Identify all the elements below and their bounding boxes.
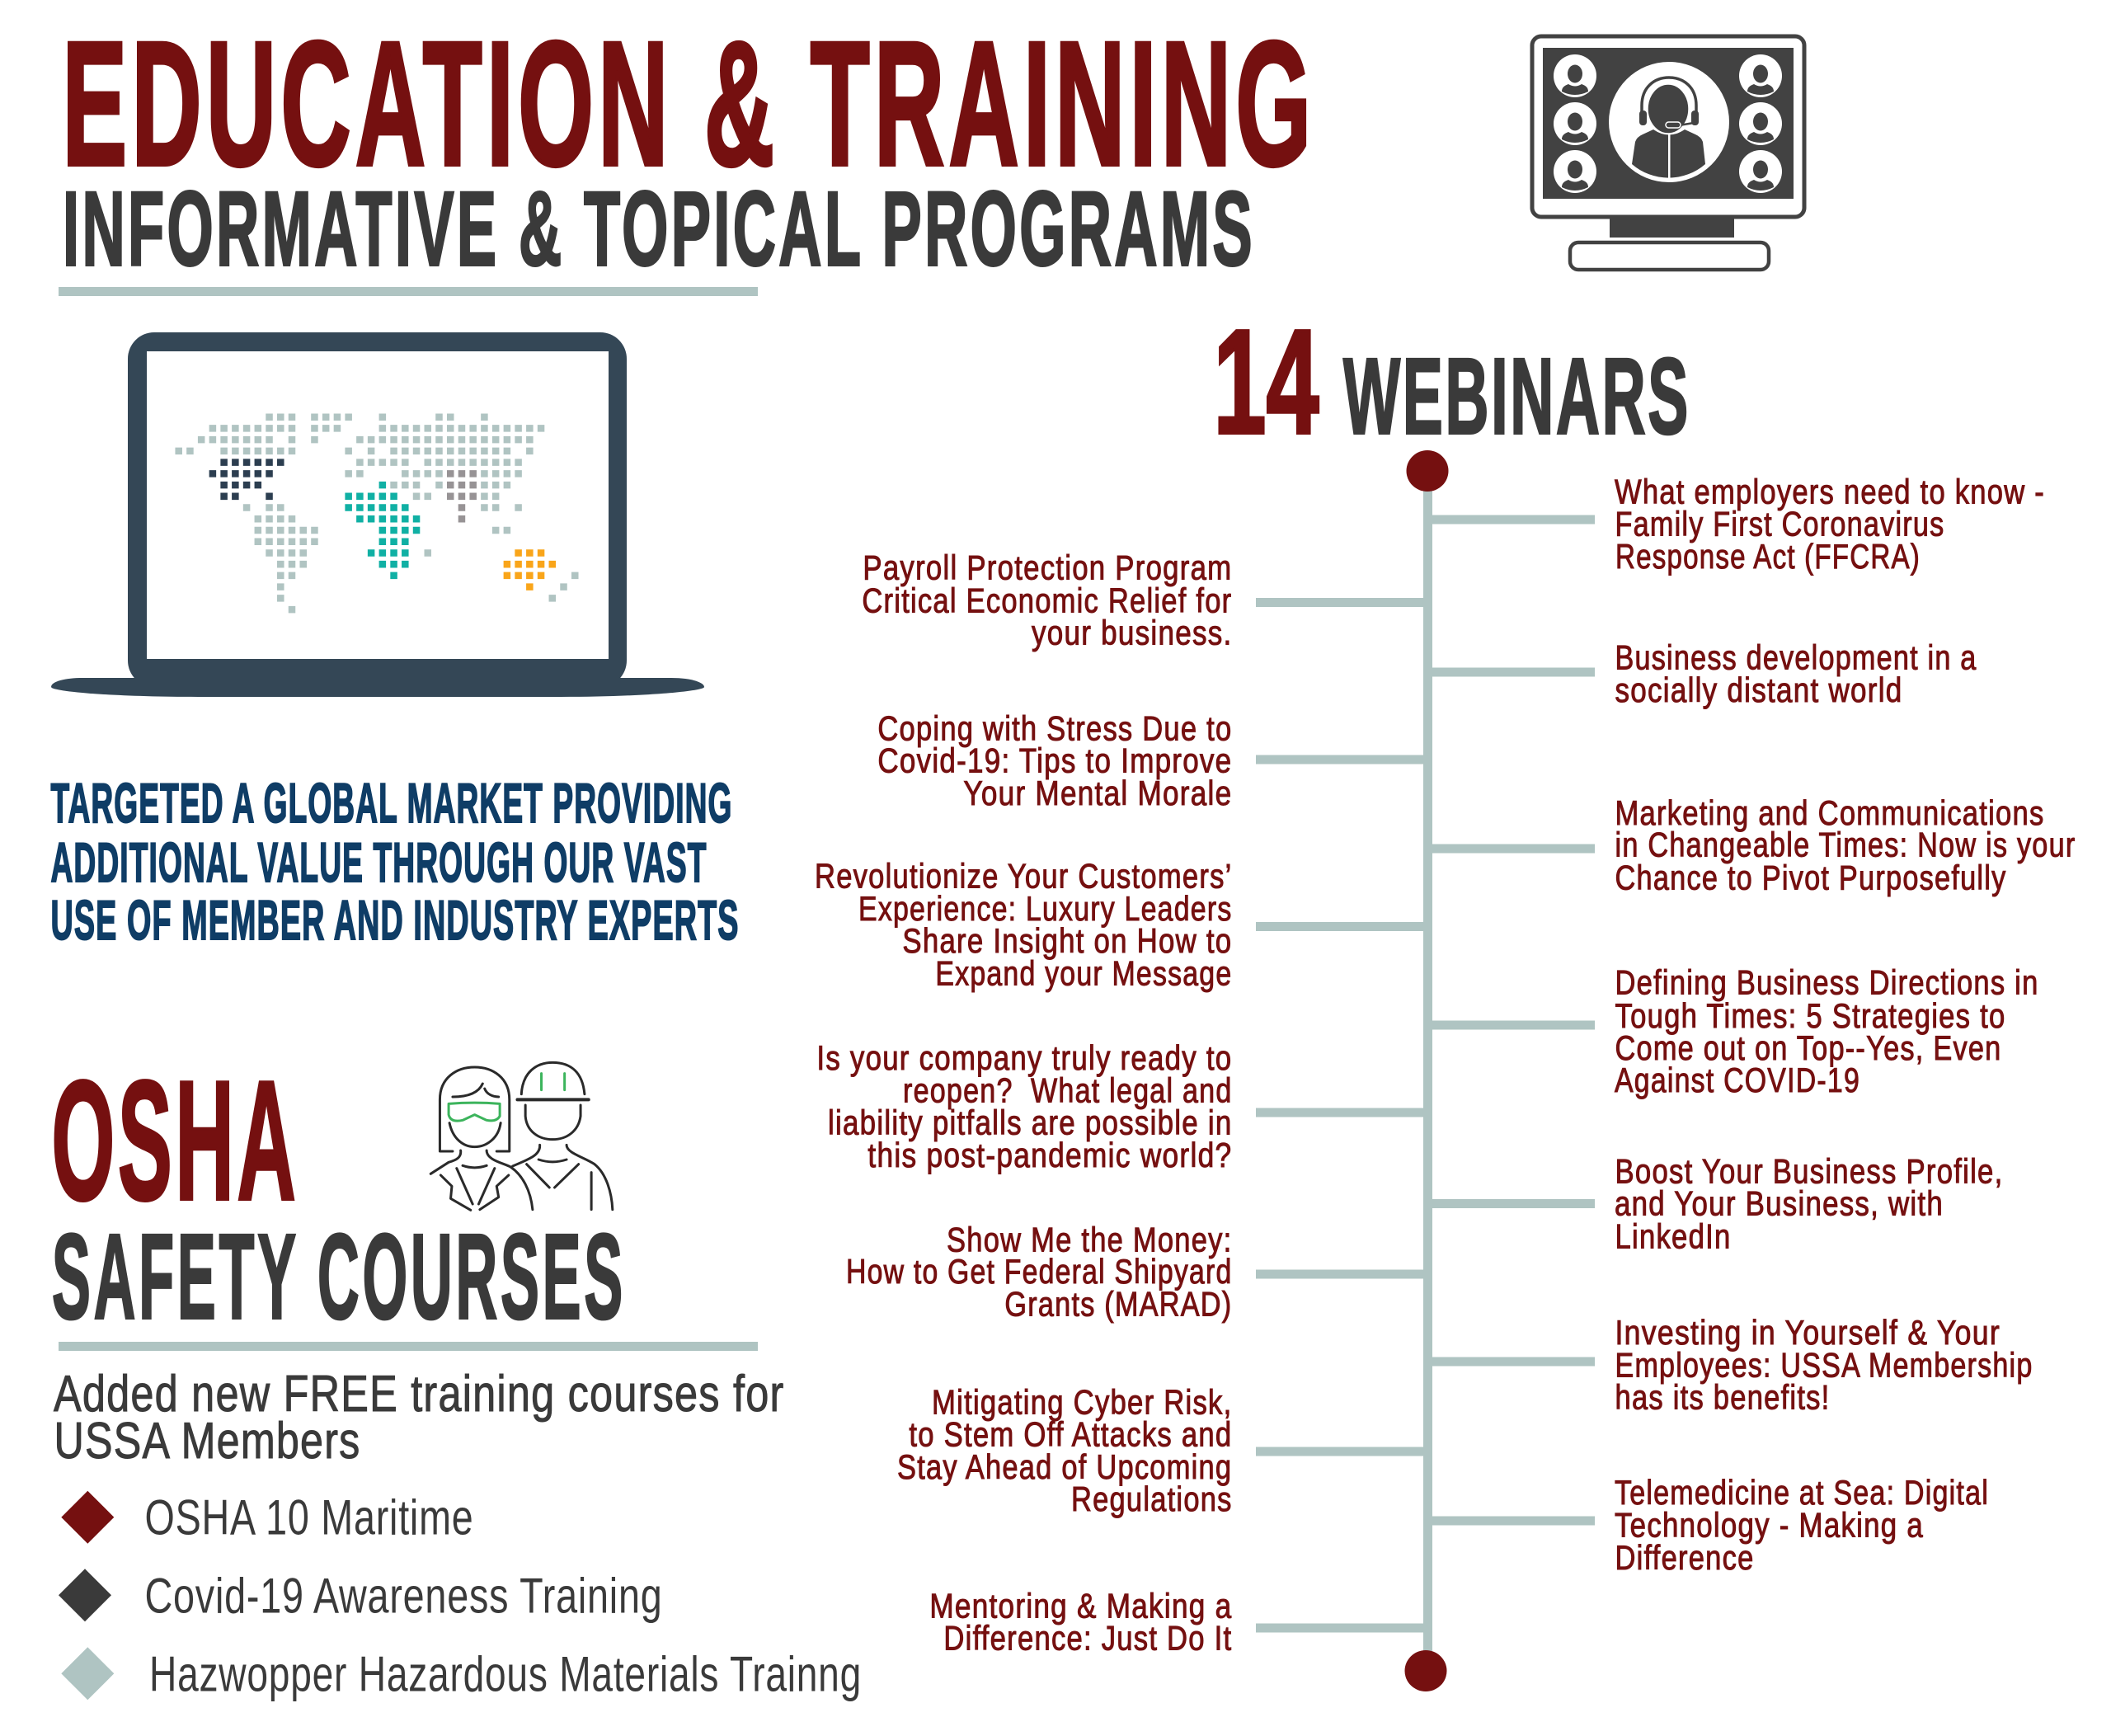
webinar: Coping with Stress: Your Mental Morale — [963, 774, 1232, 812]
webinar: Is your company truly ready: reopen? What legal and — [903, 1070, 1232, 1109]
webinar: Boost Your Business Profile: Boost Your Business Profile, — [1615, 1152, 2004, 1191]
webinar: What employers need to know: Response Act (FFCRA) — [1615, 537, 1921, 576]
webinar: Payroll Protection Program — [862, 548, 1232, 652]
text block: global market statement: ADDITIONAL VALUE THROUGH OUR VAST — [51, 831, 707, 894]
heading: 14 webinars — [1214, 299, 1690, 465]
webinar: Revolutionize Your Customers' Experience: Share Insight on How to — [902, 921, 1232, 960]
timeline — [1256, 450, 1595, 1691]
webinar: Investing in Yourself: has its benefits! — [1615, 1378, 1831, 1417]
webinar: Marketing and Communications: Chance to Pivot Purposefully — [1615, 858, 2007, 896]
section rule — [59, 1342, 758, 1351]
webinar: Revolutionize Your Customers' Experience: Experience: Luxury Leaders — [858, 889, 1232, 928]
text block: free training courses: Added new FREE training courses for — [54, 1366, 785, 1423]
icon: webinar monitor — [1532, 36, 1804, 270]
webinar: Payroll Protection Program: Payroll Protection Program — [863, 548, 1232, 587]
webinar: Is your company truly ready: this post-pandemic world? — [867, 1136, 1232, 1174]
webinar: Telemedicine at Sea: Difference — [1615, 1538, 1755, 1577]
webinar: Coping with Stress: Coping with Stress Due to — [877, 708, 1232, 747]
webinar: Boost Your Business Profile — [1615, 1152, 2004, 1256]
webinar: Telemedicine at Sea — [1615, 1473, 1989, 1577]
webinar: Payroll Protection Program: Critical Economic Relief for — [862, 581, 1232, 619]
webinar: Show Me the Money: How to Get Federal Shipyard — [846, 1252, 1232, 1291]
text block: global market statement: TARGETED A GLOBAL MARKET PROVIDING — [51, 772, 733, 835]
webinar: Show Me the Money: Grants (MARAD) — [1004, 1284, 1232, 1323]
webinar: Defining Business Directions: Come out on Top--Yes, Even — [1615, 1028, 2002, 1067]
webinar: Investing in Yourself: Investing in Yourself & Your — [1615, 1313, 2001, 1352]
webinar: Defining Business Directions: Tough Times: 5 Strategies to — [1615, 996, 2005, 1035]
header rule — [59, 287, 758, 296]
text: SAFETY COURSES — [52, 1209, 626, 1344]
webinar: Business development: Business development in a — [1615, 638, 1977, 677]
list item: Covid-19 Awareness Training: Covid-19 Awareness Training — [145, 1569, 663, 1623]
webinar: Mentoring — [929, 1587, 1232, 1658]
list item: Covid-19 Awareness Training — [59, 1569, 663, 1623]
text block: global market statement: USE OF MEMBER AND INDUSTRY EXPERTS — [51, 889, 740, 952]
webinar: Show Me the Money: Show Me the Money: — [947, 1220, 1232, 1258]
list item: OSHA 10 Maritime: OSHA 10 Maritime — [145, 1489, 473, 1545]
heading: 14 webinars: 14 — [1214, 299, 1319, 465]
webinar: Is your company truly ready: Is your company truly ready to — [816, 1038, 1232, 1077]
webinar: Boost Your Business Profile: and Your Business, with — [1615, 1184, 1944, 1223]
webinar: Marketing and Communications — [1615, 793, 2076, 896]
webinar: Boost Your Business Profile: LinkedIn — [1615, 1217, 1732, 1256]
webinar: Is your company truly ready: liability pitfalls are possible in — [828, 1103, 1232, 1142]
icon: laptop with dotted world map — [51, 332, 704, 697]
text block: free training courses — [54, 1366, 785, 1470]
webinar: Defining Business Directions — [1615, 963, 2038, 1099]
text block: global market statement — [51, 772, 740, 952]
webinar: Mentoring: Difference: Just Do It — [943, 1619, 1232, 1658]
webinar: Defining Business Directions: Against COVID-19 — [1615, 1061, 1860, 1099]
webinar: Mitigating Cyber Risk: Mitigating Cyber Risk, — [932, 1382, 1232, 1421]
webinar: Mitigating Cyber Risk: Stay Ahead of Upcoming — [897, 1447, 1232, 1486]
webinar: Mitigating Cyber Risk: Regulations — [1071, 1480, 1233, 1518]
webinar: Business development — [1615, 638, 1977, 709]
text block: free training courses: USSA Members — [54, 1413, 361, 1470]
webinar: Revolutionize Your Customers' Experience: Expand your Message — [935, 953, 1232, 992]
webinar: Business development: socially distant world — [1615, 670, 1903, 709]
webinar: Mitigating Cyber Risk: to Stem Off Attacks and — [909, 1415, 1232, 1454]
webinar: Mentoring: Mentoring & Making a — [929, 1587, 1232, 1625]
text: OSHA — [51, 1046, 299, 1235]
webinar: Telemedicine at Sea: Technology - Making a — [1615, 1506, 1924, 1544]
webinar: Is your company truly ready — [816, 1038, 1232, 1174]
webinar: Revolutionize Your Customers' Experience: Revolutionize Your Customers’ — [815, 857, 1232, 896]
webinar: What employers need to know — [1615, 473, 2045, 576]
webinar: Telemedicine at Sea: Telemedicine at Sea: Digital — [1615, 1473, 1989, 1512]
webinar: Show Me the Money — [846, 1220, 1232, 1323]
list item: Hazwopper Hazardous Materials Trainng: Hazwopper Hazardous Materials Trainng — [149, 1646, 862, 1702]
webinar: Investing in Yourself — [1615, 1313, 2033, 1417]
list item: OSHA 10 Maritime — [61, 1489, 474, 1545]
webinar: Mitigating Cyber Risk — [897, 1382, 1233, 1518]
heading: 14 webinars: WEBINARS — [1343, 335, 1690, 457]
webinar: Coping with Stress: Covid-19: Tips to Improve — [877, 741, 1232, 780]
webinar: Payroll Protection Program: your business. — [1032, 614, 1232, 652]
webinar: Revolutionize Your Customers' Experience — [815, 857, 1232, 992]
webinar: What employers need to know: Family First Coronavirus — [1615, 505, 1944, 543]
webinar: Coping with Stress — [877, 708, 1232, 812]
icon: safety workers — [430, 1062, 613, 1210]
